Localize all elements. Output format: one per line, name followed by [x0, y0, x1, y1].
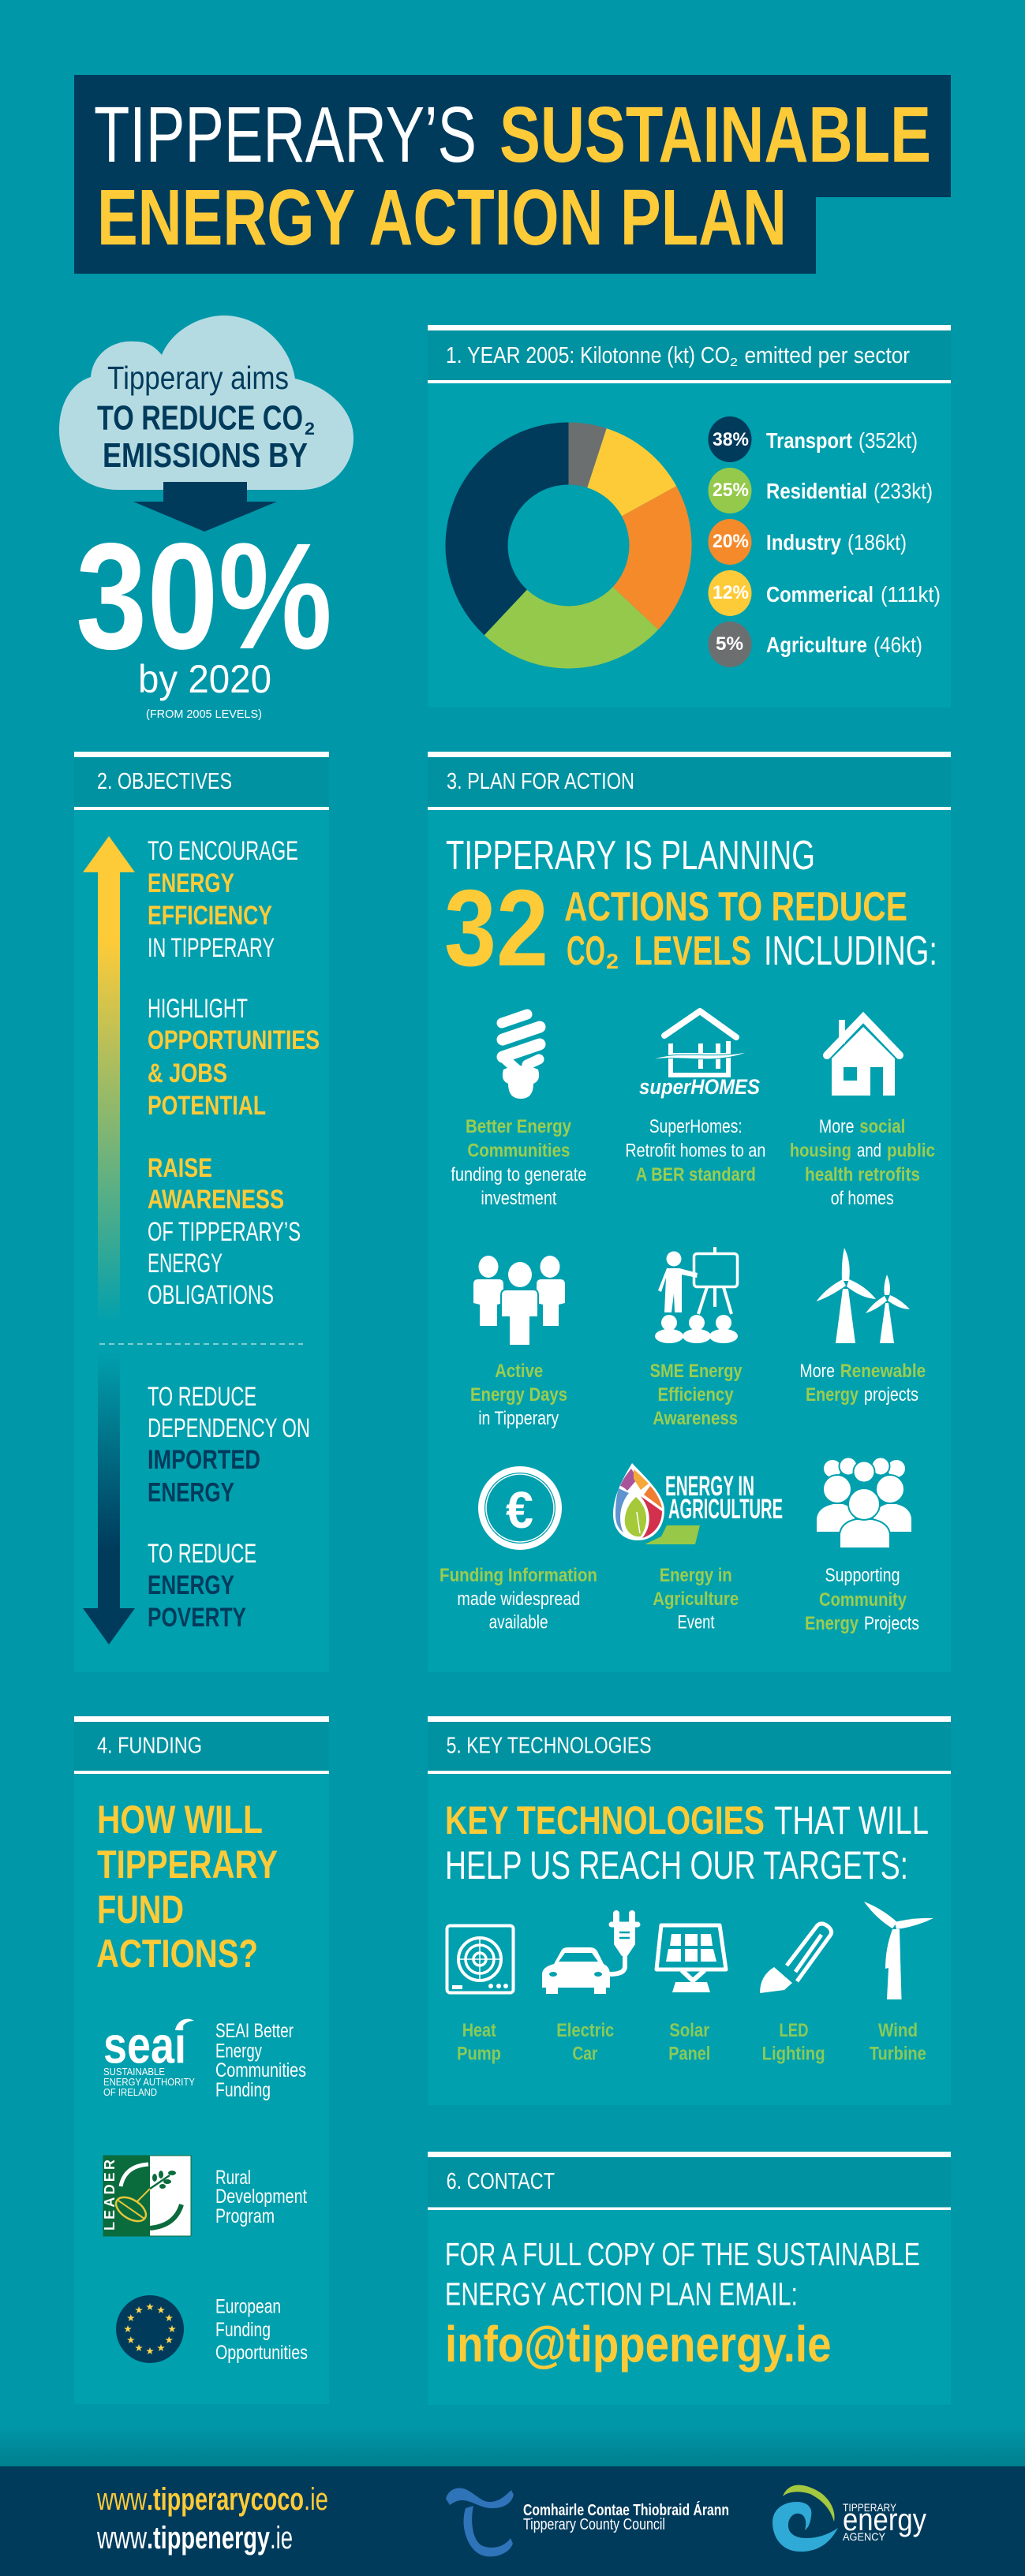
- labels row 3: Event: [677, 1612, 715, 1633]
- labels row 1: housing: [790, 1141, 851, 1161]
- legend: (46kt): [873, 633, 922, 657]
- labels row 2: [470, 1361, 926, 1429]
- big number: 30%: [76, 511, 332, 681]
- labels row 2: in Tipperary: [478, 1408, 559, 1429]
- objectives upper text: POTENTIAL: [148, 1091, 266, 1121]
- logo: seai: OF IRELAND: [103, 2086, 157, 2098]
- heading: 6. CONTACT: [447, 2169, 555, 2194]
- objectives lower text: TO REDUCE: [148, 1382, 256, 1412]
- logo: leader: [102, 2156, 191, 2236]
- cloud text: TO REDUCE CO: [97, 399, 303, 437]
- panel: 5 key technologies: [428, 1716, 951, 2105]
- leader caption: [215, 2167, 307, 2227]
- lead text: KEY TECHNOLOGIES: [445, 1798, 765, 1842]
- objectives upper text: & JOBS: [148, 1058, 227, 1088]
- legend: 20%: [713, 531, 749, 552]
- question: FUND: [97, 1887, 184, 1932]
- lead text: 32: [444, 868, 548, 989]
- panel: 4 funding: [74, 1716, 329, 2404]
- logo: seai: [103, 2016, 195, 2098]
- web links: www: [96, 2521, 147, 2555]
- lead text: 2: [606, 950, 619, 973]
- logo: tipperary county council: Comhairle Contae Thiobraid Árann: [523, 2501, 729, 2519]
- question: ACTIONS?: [96, 1932, 258, 1976]
- icon: energy in agriculture logo: [613, 1463, 783, 1544]
- labels row 3: Funding Information: [440, 1565, 597, 1586]
- logo: tipperary energy agency: [772, 2485, 926, 2552]
- seai caption: Funding: [215, 2079, 271, 2101]
- objectives lower text: DEPENDENCY ON: [148, 1413, 310, 1443]
- footer: [0, 2466, 1025, 2576]
- objectives upper text: OF TIPPERARY’S: [148, 1217, 301, 1247]
- icon: superhomes: superHOMES: [639, 1075, 760, 1099]
- european caption: [215, 2295, 308, 2364]
- legend: (352kt): [859, 428, 918, 453]
- legend: [709, 416, 941, 667]
- labels row 1: More: [819, 1116, 854, 1137]
- icon: community group: [816, 1458, 912, 1548]
- panel: 3 plan for action: [428, 752, 951, 1672]
- labels row 1: Better Energy: [466, 1116, 572, 1137]
- question: TIPPERARY: [97, 1842, 278, 1887]
- lead text: [445, 1798, 929, 1887]
- arrow: down: [83, 1352, 135, 1645]
- icon: wind turbine: [864, 1902, 933, 1999]
- donut chart: [446, 422, 692, 668]
- title: [74, 75, 951, 274]
- logo: tipperary county council: [446, 2488, 729, 2556]
- objectives lower text: TO REDUCE: [148, 1539, 256, 1569]
- labels row 2: Active: [495, 1361, 543, 1382]
- legend: 12%: [713, 582, 749, 603]
- legend: 5%: [716, 633, 743, 655]
- european caption: European: [215, 2295, 281, 2317]
- web links: www: [96, 2482, 147, 2517]
- seai caption: SEAI Better: [215, 2020, 294, 2042]
- seai caption: [215, 2020, 306, 2101]
- icon: house: [827, 1017, 900, 1096]
- labels row 1: social: [859, 1116, 905, 1137]
- objectives lower text: ENERGY: [148, 1478, 234, 1508]
- legend: Residential: [766, 479, 867, 503]
- from 2005 levels: (FROM 2005 LEVELS): [146, 707, 262, 721]
- heading: 4. FUNDING: [97, 1734, 202, 1759]
- legend: Industry: [766, 530, 841, 554]
- labels row 3: Supporting: [825, 1565, 900, 1586]
- legend: 25%: [713, 480, 749, 501]
- labels row 2: projects: [864, 1384, 918, 1406]
- icon: heat pump: [447, 1926, 513, 1992]
- panel: 6 contact: [428, 2152, 951, 2405]
- logo: european flag: [116, 2295, 184, 2363]
- labels row 3: Energy: [805, 1613, 859, 1634]
- heading: 1. YEAR 2005: Kilotonne (kt) CO: [446, 343, 730, 368]
- heading: 3. PLAN FOR ACTION: [447, 769, 634, 794]
- labels row 1: [451, 1116, 935, 1209]
- question: HOW WILL: [97, 1798, 263, 1842]
- european caption: Opportunities: [215, 2342, 308, 2364]
- panel: 2 objectives: [74, 752, 329, 1672]
- objectives upper text: HIGHLIGHT: [148, 994, 248, 1024]
- labels: Electric: [556, 2020, 614, 2041]
- logo: tipperary county council: Tipperary County Council: [523, 2516, 665, 2533]
- arrow: [133, 482, 277, 532]
- objectives upper text: EFFICIENCY: [148, 901, 272, 931]
- icon: people: [473, 1256, 565, 1346]
- labels: LED: [780, 2020, 808, 2041]
- logo: leader: LEADER: [102, 2160, 118, 2231]
- labels: Car: [572, 2043, 597, 2064]
- labels: Turbine: [870, 2043, 926, 2064]
- legend: (186kt): [847, 530, 907, 554]
- labels row 3: [440, 1565, 919, 1634]
- labels row 2: Renewable: [840, 1361, 926, 1382]
- title: TIPPERARY’S: [94, 91, 477, 179]
- objectives lower text: [148, 1382, 310, 1633]
- web links: .ie: [270, 2521, 293, 2555]
- logo: seai: ENERGY AUTHORITY: [103, 2076, 195, 2088]
- labels row 2: Awareness: [653, 1408, 738, 1429]
- labels: Wind: [878, 2020, 918, 2041]
- labels row 1: SuperHomes:: [649, 1116, 743, 1137]
- web links: .tipperarycoco: [147, 2482, 304, 2517]
- labels row 1: Retrofit homes to an: [625, 1141, 765, 1161]
- labels row 3: Community: [819, 1589, 907, 1611]
- question: [96, 1798, 278, 1976]
- labels row 2: More: [799, 1361, 835, 1382]
- heading: 2. OBJECTIVES: [97, 769, 232, 794]
- legend: Commerical: [766, 582, 873, 607]
- legend: (233kt): [873, 479, 933, 503]
- contact text: [445, 2236, 920, 2313]
- cloud text: [97, 360, 315, 475]
- labels row 1: Communities: [467, 1141, 570, 1161]
- leader caption: Rural: [215, 2167, 251, 2189]
- by 2020: by 2020: [138, 657, 271, 701]
- icon: euro: [478, 1466, 562, 1550]
- logo: tipperary energy agency: AGENCY: [843, 2530, 886, 2543]
- title: ENERGY ACTION PLAN: [97, 174, 787, 262]
- labels row 3: Projects: [864, 1613, 919, 1634]
- logo: seai: seai: [103, 2016, 186, 2074]
- logo: tipperary energy agency: energy: [843, 2503, 926, 2537]
- labels row 3: available: [489, 1612, 548, 1633]
- objectives lower text: IMPORTED: [148, 1445, 260, 1475]
- seai caption: Communities: [215, 2059, 306, 2081]
- heading: 2: [730, 356, 738, 369]
- labels: Pump: [457, 2043, 501, 2064]
- legend: 38%: [713, 429, 749, 450]
- labels: [457, 2020, 926, 2064]
- labels row 1: health retrofits: [805, 1164, 920, 1185]
- logo: tipperary energy agency: TIPPERARY: [843, 2501, 897, 2514]
- lead text: LEVELS: [634, 928, 751, 974]
- labels row 1: and: [857, 1141, 881, 1161]
- legend: (111kt): [881, 582, 941, 607]
- lead text: INCLUDING:: [764, 928, 937, 974]
- objectives upper text: AWARENESS: [148, 1185, 284, 1215]
- heading: [446, 343, 910, 369]
- labels: Panel: [668, 2043, 710, 2064]
- cloud text: Tipperary aims: [107, 360, 289, 396]
- objectives upper text: OBLIGATIONS: [148, 1280, 274, 1310]
- labels row 1: public: [887, 1141, 935, 1161]
- labels row 2: Efficiency: [658, 1384, 734, 1406]
- lead text: CO: [567, 928, 605, 974]
- icon: euro: €: [506, 1480, 533, 1539]
- icon: cloud: [59, 315, 354, 490]
- labels row 1: of homes: [831, 1188, 894, 1209]
- objectives lower text: ENERGY: [148, 1570, 234, 1600]
- lead text: THAT WILL: [774, 1798, 929, 1842]
- labels: Heat: [462, 2020, 496, 2041]
- lead text: TIPPERARY IS PLANNING: [446, 833, 815, 879]
- objectives upper text: OPPORTUNITIES: [148, 1025, 320, 1055]
- panel: 1 emissions per sector: [428, 325, 951, 707]
- labels row 1: funding to generate: [451, 1164, 586, 1185]
- icon: light bulb: [502, 1014, 540, 1099]
- leader caption: Development: [215, 2186, 307, 2208]
- european caption: Funding: [215, 2319, 271, 2341]
- labels row 3: Energy in: [660, 1565, 732, 1586]
- labels row 3: Agriculture: [653, 1589, 739, 1610]
- icon: electric car: [542, 1913, 638, 1994]
- heading: 5. KEY TECHNOLOGIES: [447, 1734, 652, 1759]
- cloud text: 2: [305, 419, 315, 439]
- lead text: ACTIONS TO REDUCE: [564, 884, 907, 930]
- labels row 2: Energy Days: [470, 1384, 567, 1406]
- objectives upper text: ENERGY: [148, 868, 234, 898]
- labels row 3: made widespread: [457, 1589, 580, 1610]
- icon: energy in agriculture logo: ENERGY IN: [665, 1471, 754, 1502]
- cloud text: EMISSIONS BY: [103, 436, 308, 475]
- contact text: ENERGY ACTION PLAN EMAIL:: [445, 2276, 798, 2313]
- heading: emitted per sector: [745, 343, 910, 368]
- web links: .tippenergy: [147, 2521, 271, 2555]
- objectives upper text: ENERGY: [148, 1249, 223, 1279]
- objectives lower text: POVERTY: [148, 1603, 246, 1633]
- objectives upper text: RAISE: [148, 1153, 212, 1183]
- objectives upper text: [148, 836, 320, 1310]
- labels: Solar: [669, 2020, 709, 2041]
- labels row 2: Energy: [806, 1384, 859, 1406]
- labels row 1: investment: [481, 1188, 557, 1209]
- icon: wind turbines: [816, 1248, 910, 1343]
- seai caption: Energy: [215, 2040, 262, 2062]
- icon: solar panel: [657, 1925, 726, 1992]
- icon: led lighting: [760, 1924, 832, 1993]
- web links: [96, 2482, 328, 2555]
- callout: reduce CO2 by 30%: [59, 315, 354, 721]
- objectives upper text: TO ENCOURAGE: [148, 836, 298, 866]
- arrow: up: [83, 836, 135, 1325]
- icon: superhomes: [639, 1011, 760, 1099]
- web links: .ie: [304, 2482, 328, 2517]
- icon: presenter: [655, 1247, 738, 1343]
- labels row 1: A BER standard: [636, 1164, 756, 1185]
- lead text: [444, 833, 937, 989]
- leader caption: Program: [215, 2205, 275, 2227]
- legend: Transport: [766, 428, 852, 453]
- labels: Lighting: [762, 2043, 825, 2064]
- icon: energy in agriculture logo: AGRICULTURE: [668, 1494, 783, 1525]
- logo: seai: SUSTAINABLE: [103, 2066, 165, 2078]
- labels row 2: SME Energy: [650, 1361, 743, 1382]
- legend: Agriculture: [766, 633, 867, 657]
- objectives upper text: IN TIPPERARY: [148, 933, 275, 963]
- email: info@tippenergy.ie: [445, 2316, 832, 2373]
